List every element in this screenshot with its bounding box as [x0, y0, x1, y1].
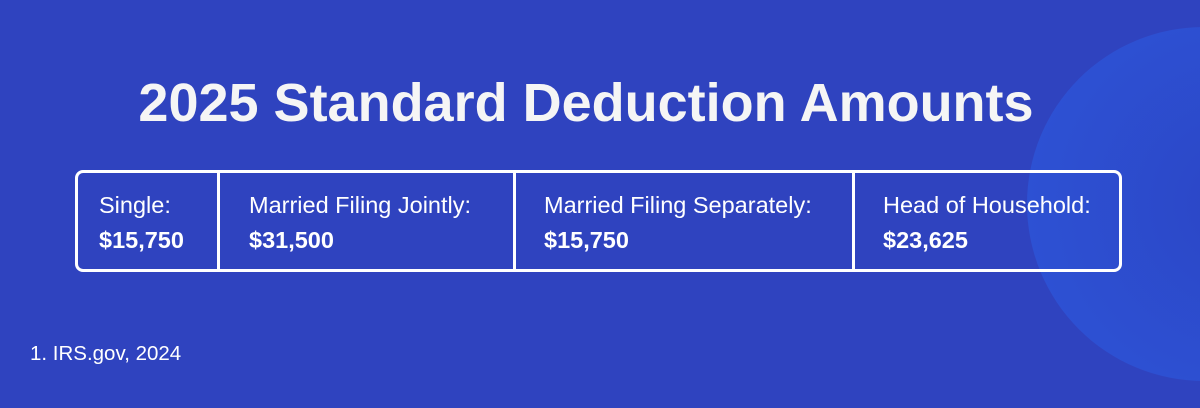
cell: married jointly: [217, 173, 513, 269]
cell: married jointly: Married Filing Jointly:: [249, 192, 471, 218]
cell: single: $15,750: [99, 227, 184, 253]
decorative circle: [1027, 27, 1200, 381]
source footnote: 1. IRS.gov, 2024: [30, 342, 181, 365]
cell: married separately: $15,750: [544, 227, 629, 253]
cell: head of household: Head of Household:: [883, 192, 1091, 218]
cell: single: Single:: [99, 192, 171, 218]
cell: married jointly: $31,500: [249, 227, 334, 253]
cell: married separately: [513, 173, 852, 269]
cell: head of household: [852, 173, 1119, 269]
cell: married separately: Married Filing Separately:: [544, 192, 812, 218]
cell: head of household: $23,625: [883, 227, 968, 253]
title: 2025 Standard Deduction Amounts: [138, 73, 1034, 133]
panel: deduction table: [75, 170, 1122, 272]
cell: single: [99, 192, 184, 253]
